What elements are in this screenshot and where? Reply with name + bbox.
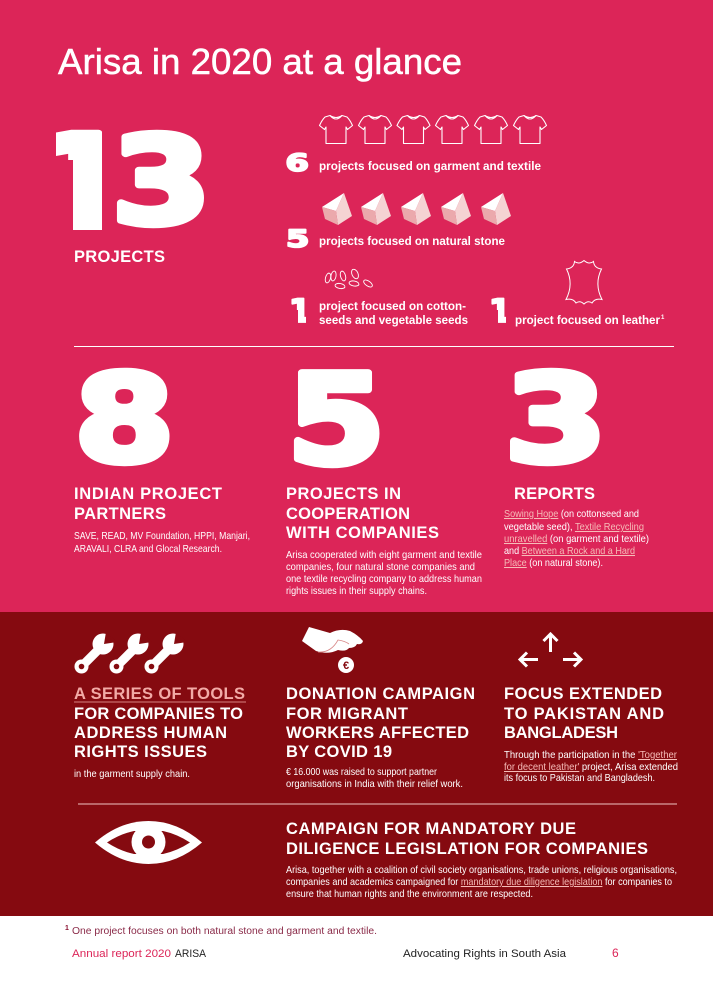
icons: stones: [322, 193, 511, 225]
sector: cotton seeds: [289, 268, 468, 330]
icons: t-shirts: [320, 116, 546, 144]
block: a series of tools: ADDRESS HUMAN: [74, 724, 227, 742]
block: campaign for mandatory due diligence: CAMPAIGN FOR MANDATORY DUE: [286, 820, 576, 838]
sector: garment and textile: [286, 116, 546, 177]
block: focus extended to Pakistan and Bangladesh: for decent leather' project, Arisa extended: [504, 762, 678, 773]
block: a series of tools: [74, 632, 246, 780]
block: donation campaign: € 16.000 was raised to support partner: [286, 767, 437, 778]
sector: cotton seeds: seeds and vegetable seeds: [319, 313, 468, 327]
stat: 13 projects: PROJECTS: [74, 248, 165, 266]
block: donation campaign: BY COVID 19: [286, 743, 392, 761]
stat: 8 Indian project partners: PARTNERS: [74, 505, 166, 523]
block: donation campaign: FOR MIGRANT: [286, 705, 408, 723]
stat: 3 reports: 3: [504, 349, 607, 490]
block: campaign for mandatory due diligence: companies and academics campaigned for mandatory due diligence legislation for companies to: [286, 877, 672, 888]
panel: white footer background: [0, 916, 713, 1008]
sector: leather: [489, 260, 665, 330]
sector: natural stone: 5: [286, 225, 309, 253]
stat: 5 projects in cooperation with companies: PROJECTS IN: [286, 485, 401, 503]
stat: 8 Indian project partners: SAVE, READ, MV Foundation, HPPI, Manjari,: [74, 531, 250, 542]
block: focus extended to Pakistan and Bangladesh: TO PAKISTAN AND: [504, 705, 664, 723]
stat: 3 reports: REPORTS: [514, 485, 595, 503]
sector: leather: 1: [489, 292, 511, 330]
sector: garment and textile: 6: [286, 149, 309, 177]
block: focus extended to Pakistan and Bangladesh: FOCUS EXTENDED: [504, 685, 662, 703]
stat: 3 reports: unravelled (on garment and textile): [504, 534, 649, 545]
footer: report name: ARISA: [175, 948, 207, 960]
block: donation campaign: organisations in India with their relief work.: [286, 779, 463, 790]
stat: 13 projects: 1: [30, 108, 133, 257]
sector: leather: 1: [661, 315, 665, 321]
stat: 5 projects in cooperation with companies: Arisa cooperated with eight garment and textile: [286, 550, 482, 561]
footnote: 1: [65, 925, 69, 932]
icon: giving hand with euro coin: [302, 627, 363, 673]
stat: 5 projects in cooperation with companies: rights issues in their supply chains.: [286, 586, 427, 597]
footnote: One project focuses on both natural stone and garment and textile.: [72, 926, 377, 937]
icon: three arrows: [520, 634, 581, 666]
icon: wrenches: [74, 632, 187, 674]
stat: 5 projects in cooperation with companies: 5: [287, 349, 385, 493]
block: focus extended to Pakistan and Bangladesh: its focus to Pakistan and Bangladesh.: [504, 773, 655, 784]
stat: 13 projects: [56, 130, 204, 262]
footer: report name: Annual report 2020: [72, 948, 171, 960]
block: campaign for mandatory due diligence: DILIGENCE LEGISLATION FOR COMPANIES: [286, 840, 648, 858]
icon: seeds: [324, 268, 374, 289]
footer: tagline: Advocating Rights in South Asia: [403, 948, 567, 960]
stat: 5 projects in cooperation with companies: one textile recycling company to address human: [286, 574, 482, 585]
block: a series of tools: RIGHTS ISSUES: [74, 743, 207, 761]
block: donation campaign: [286, 627, 475, 790]
block: a series of tools: in the garment supply chain.: [74, 769, 190, 780]
stat: 5 projects in cooperation with companies: COOPERATION: [286, 505, 410, 523]
title: Arisa in 2020 at a glance: [58, 41, 462, 82]
stat: 5 projects in cooperation with companies: WITH COMPANIES: [286, 524, 439, 542]
panel: pink background: [0, 0, 713, 612]
sector: garment and textile: projects focused on garment and textile: [319, 159, 541, 173]
icon: eye: [95, 821, 202, 864]
stat: 3 reports: Sowing Hope (on cottonseed and: [504, 509, 639, 520]
stat: 8 Indian project partners: 8: [74, 350, 174, 490]
block: focus extended to Pakistan and Bangladesh: BANGLADESH: [504, 724, 618, 742]
stat: 3 reports: Place (on natural stone).: [504, 558, 603, 569]
stat: 8 Indian project partners: INDIAN PROJECT: [74, 485, 222, 503]
stat: 8 Indian project partners: ARAVALI, CLRA and Glocal Research.: [74, 544, 222, 555]
sector: natural stone: projects focused on natural stone: [319, 234, 505, 248]
icon: giving hand with euro coin: €: [343, 660, 349, 672]
stat: 5 projects in cooperation with companies: [286, 349, 482, 597]
block: campaign for mandatory due diligence: ensure that human rights and the environment are respected.: [286, 889, 533, 900]
sector: cotton seeds: project focused on cotton-: [319, 299, 466, 313]
footer: page number: 6: [612, 946, 619, 960]
footer: report name: [72, 948, 207, 960]
block: a series of tools: A SERIES OF TOOLS: [74, 685, 245, 703]
sector: leather: project focused on leather: [515, 313, 660, 327]
stat: 3 reports: vegetable seed), Textile Recycling: [504, 522, 644, 533]
stat: 3 reports: [504, 349, 649, 569]
icon: leather hide: [566, 260, 602, 304]
sector: natural stone: [286, 193, 511, 253]
stat: 13 projects: 3: [112, 112, 211, 252]
block: focus extended to Pakistan and Bangladesh: [504, 634, 678, 784]
panel: dark red background: [0, 612, 713, 916]
sector: cotton seeds: 1: [289, 292, 311, 330]
block: campaign for mandatory due diligence: [286, 820, 677, 900]
block: donation campaign: WORKERS AFFECTED: [286, 724, 469, 742]
stat: 8 Indian project partners: [74, 350, 250, 555]
block: a series of tools: FOR COMPANIES TO: [74, 705, 243, 723]
stat: 3 reports: and Between a Rock and a Hard: [504, 546, 635, 557]
stat: 5 projects in cooperation with companies: companies, four natural stone companies and: [286, 562, 475, 573]
block: donation campaign: DONATION CAMPAIGN: [286, 685, 475, 703]
block: focus extended to Pakistan and Bangladesh: Through the participation in the 'Together: [504, 750, 678, 761]
